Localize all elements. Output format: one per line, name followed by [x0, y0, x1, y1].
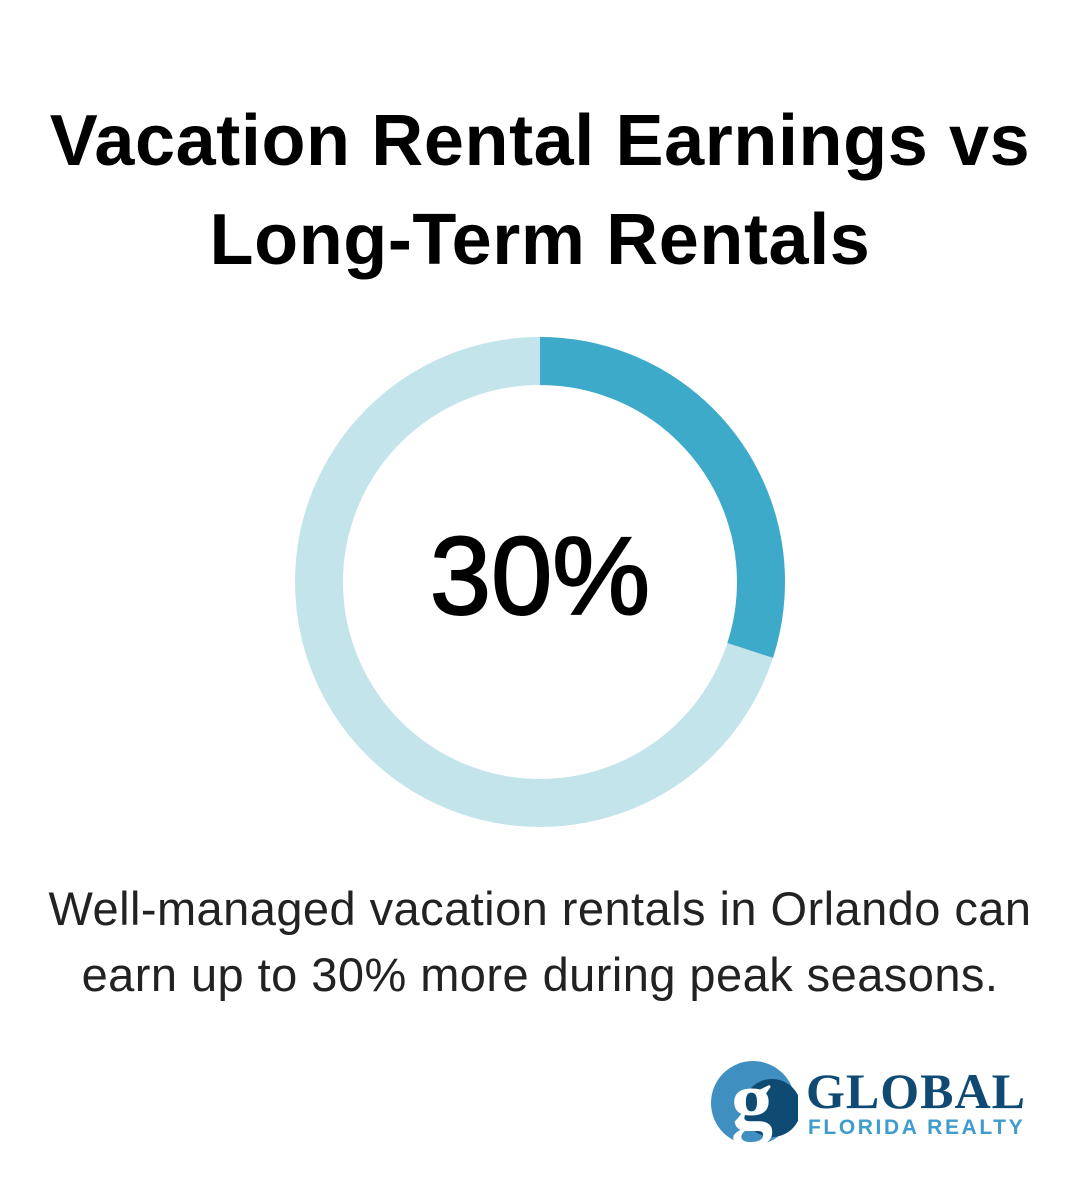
description: Well-managed vacation rentals in Orlando can	[49, 882, 1031, 935]
icon: g circle	[711, 1060, 798, 1147]
title: Long-Term Rentals	[210, 200, 870, 280]
title: Vacation Rental Earnings vs	[50, 101, 1030, 181]
title	[50, 101, 1030, 280]
donut chart: 30%	[430, 515, 650, 638]
logo	[711, 1060, 1026, 1147]
logo text: GLOBAL	[806, 1063, 1026, 1119]
description: earn up to 30% more during peak seasons.	[82, 948, 998, 1001]
logo: FLORIDA REALTY	[808, 1116, 1025, 1139]
description	[48, 882, 1031, 1001]
